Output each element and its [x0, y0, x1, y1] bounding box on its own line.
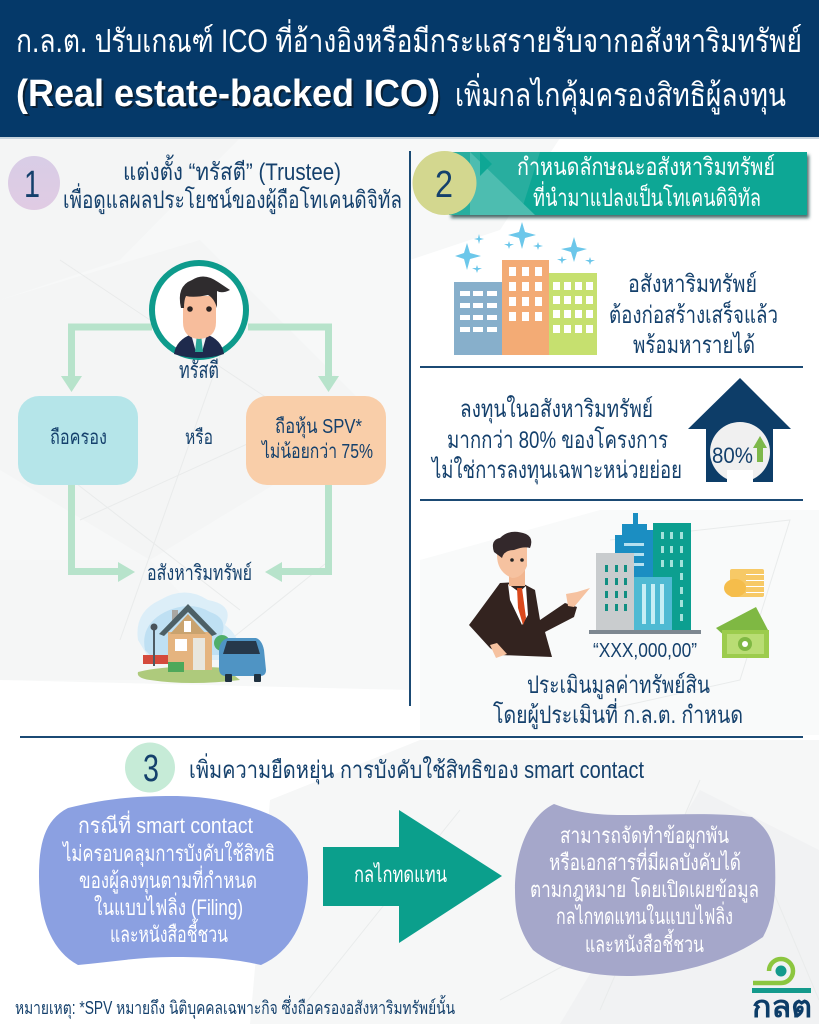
blob: solution	[515, 804, 775, 976]
title line 2: (Real estate-backed ICO)	[16, 73, 440, 115]
text: over 80 percent: ลงทุนในอสังหาริมทรัพย์	[460, 395, 653, 424]
box: SPV shares: ไม่น้อยกว่า 75%	[260, 440, 373, 463]
trustee label: ทรัสตี	[179, 357, 219, 383]
property value text: “XXX,000,00”	[593, 640, 697, 662]
text: completed property: อสังหาริมทรัพย์	[628, 270, 757, 298]
panel 1 heading: แต่งตั้ง “ทรัสตี” (Trustee)	[123, 154, 341, 186]
box: SPV shares: ถือหุ้น SPV*	[275, 416, 362, 439]
blob: problem case	[39, 796, 308, 965]
logo	[752, 959, 812, 1024]
number badge 3: 3	[143, 748, 159, 790]
blob: solution: หรือเอกสารที่มีผลบังคับได้	[549, 847, 741, 875]
text: completed property: พร้อมหารายได้	[633, 331, 755, 359]
blob: solution: ตามกฎหมาย โดยเปิดเผยข้อมูล	[530, 877, 759, 903]
panel 3: smart contract	[39, 742, 775, 976]
box: SPV shares	[246, 396, 386, 485]
text: appraisal: ประเมินมูลค่าทรัพย์สิน	[527, 671, 710, 700]
businessman	[469, 532, 590, 658]
panel 1 heading	[63, 154, 402, 215]
text: completed property	[609, 270, 778, 359]
office towers	[589, 513, 701, 634]
title line 2	[16, 73, 786, 117]
number badge 3	[125, 742, 175, 792]
arrow: alternative mechanism	[323, 810, 502, 943]
blob: problem case: กรณีที่ smart contact	[78, 810, 253, 838]
real estate label: อสังหาริมทรัพย์	[147, 561, 252, 585]
box: direct ownership: ถือครอง	[50, 427, 107, 449]
text: appraisal	[493, 671, 743, 730]
number badge 2: 2	[435, 164, 453, 206]
icon: buildings with sparkles	[454, 222, 597, 355]
title line 2: (Real estate-backed ICO)	[18, 75, 442, 117]
icon: coins	[724, 569, 764, 597]
logo: กลต	[752, 991, 812, 1024]
panel 2: property characteristics	[412, 151, 807, 730]
arrow: alternative mechanism: กลไกทดแทน	[354, 862, 447, 887]
blob: solution: กลไกทดแทนในแบบไฟลิ่ง	[556, 901, 733, 929]
text: over 80 percent	[430, 395, 682, 485]
footnote: หมายเหตุ: *SPV หมายถึง นิติบุคคลเฉพาะกิจ ซึ่งถือครองอสังหาริมทรัพย์นั้น	[15, 995, 455, 1019]
number badge 1: 1	[24, 164, 40, 206]
blob: solution: สามารถจัดทำข้อผูกพัน	[560, 823, 729, 849]
or label: หรือ	[185, 427, 213, 449]
panel 3 heading: เพิ่มความยืดหยุ่น การบังคับใช้สิทธิของ smart contact	[189, 753, 644, 785]
box: direct ownership	[18, 396, 138, 485]
icon: house 80 percent: 80%	[712, 443, 753, 468]
icon: banknotes	[716, 607, 769, 658]
panel 1: trustee	[8, 154, 402, 683]
teal heading banner	[449, 152, 807, 215]
text: over 80 percent: ไม่ใช่การลงทุนเฉพาะหน่วยย่อย	[430, 456, 682, 485]
flow arrows	[61, 327, 339, 582]
blob: solution: และหนังสือชี้ชวน	[585, 929, 704, 957]
icon: appraiser with buildings	[469, 513, 769, 662]
number badge 1	[8, 156, 60, 210]
icon: house and car	[137, 592, 266, 683]
header banner	[0, 0, 819, 139]
icon: house 80 percent	[688, 378, 791, 483]
blob: problem case: ของผู้ลงทุนตามที่กำหนด	[79, 865, 257, 894]
blob: problem case: ไม่ครอบคลุมการบังคับใช้สิทธิ	[61, 841, 275, 867]
number badge 2	[412, 151, 476, 215]
icon: trustee portrait	[152, 263, 246, 358]
blob: problem case: และหนังสือชี้ชวน	[110, 919, 228, 947]
blob: problem case: ในแบบไฟลิ่ง (Filing)	[94, 892, 243, 920]
panel 1 heading: เพื่อดูแลผลประโยชน์ของผู้ถือโทเคนดิจิทัล	[63, 183, 402, 215]
text: over 80 percent: มากกว่า 80% ของโครงการ	[447, 426, 668, 454]
column divider	[409, 151, 411, 706]
text: appraisal: โดยผู้ประเมินที่ ก.ล.ต. กำหนด	[493, 698, 743, 730]
